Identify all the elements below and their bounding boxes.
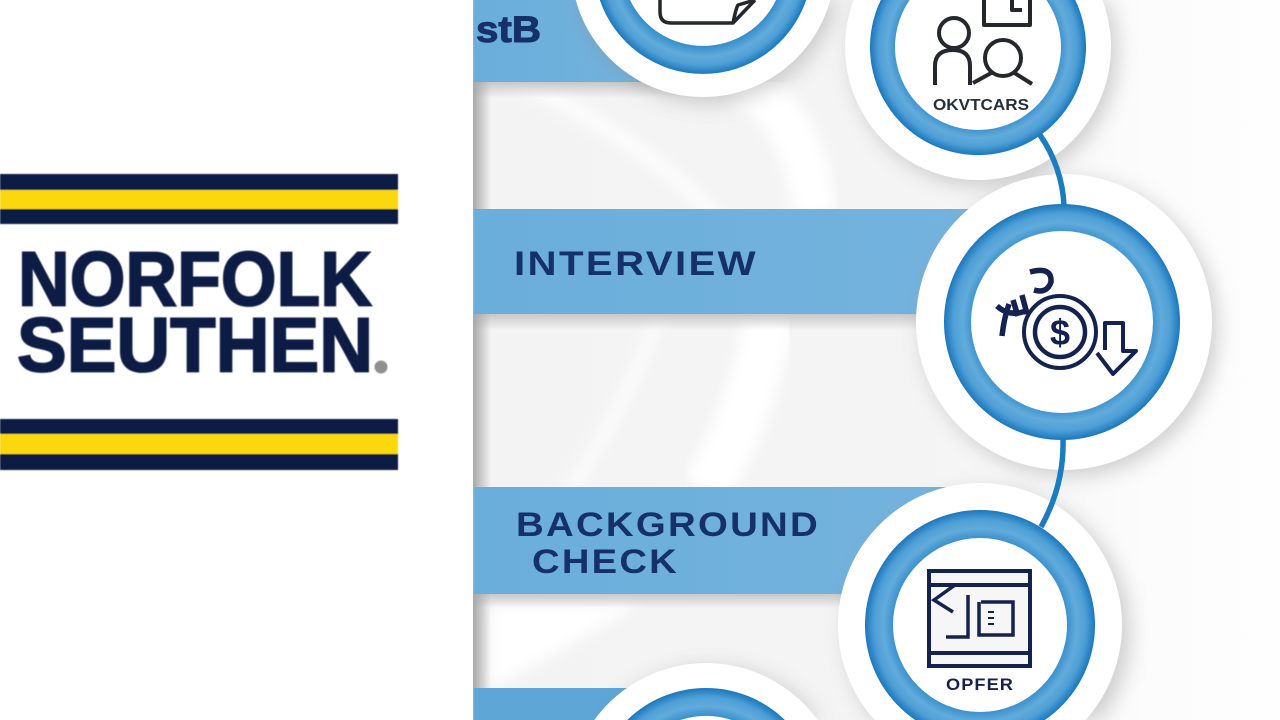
logo wordmark: SEUTHEN — [17, 302, 373, 388]
logo bottom stripes — [0, 419, 398, 470]
step circle 1: document — [576, 0, 830, 97]
interview label: INTERVIEW — [514, 245, 758, 283]
connector lines — [1040, 135, 1064, 527]
icon: coin and down arrow — [997, 270, 1136, 374]
coin dollar sign: $ — [1050, 312, 1070, 353]
logo: Norfolk Seuthen — [0, 174, 398, 470]
icon caption: OKVTCARS — [933, 97, 1029, 114]
step bar 4 — [474, 688, 654, 720]
icon: people and document — [935, 0, 1032, 85]
icon: offer window — [929, 571, 1030, 666]
background check label — [516, 506, 820, 581]
step circle 3: salary — [916, 174, 1212, 470]
step bar 3: background check — [474, 487, 954, 594]
step bar 1 — [474, 0, 674, 82]
step bar 2: interview — [474, 209, 974, 314]
step circle 5 — [594, 663, 818, 720]
halo shadows — [579, 0, 1218, 720]
icon caption: OPFER — [946, 675, 1014, 694]
background check label: CHECK — [532, 543, 679, 581]
step circle 4: offer — [838, 483, 1122, 720]
step 1 label: stB — [476, 9, 541, 50]
step circle 2: people — [845, 0, 1111, 180]
logo top stripes — [0, 174, 398, 224]
icon: document — [660, 0, 755, 23]
background check label: BACKGROUND — [516, 506, 820, 544]
logo wordmark — [17, 236, 388, 388]
panel: process background — [473, 0, 1008, 720]
logo wordmark: NORFOLK — [18, 236, 372, 322]
